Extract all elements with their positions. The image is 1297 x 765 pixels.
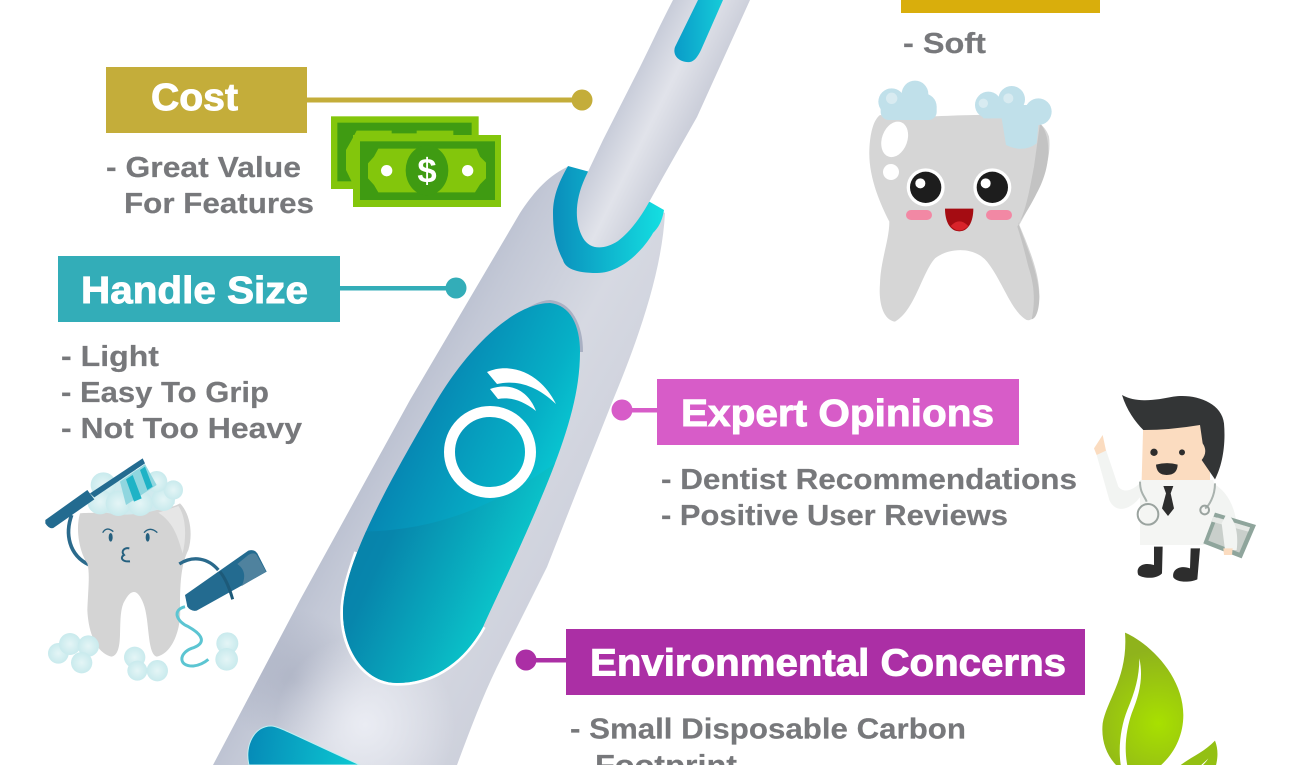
environmental connector (516, 650, 566, 670)
toothbrush handle (200, 160, 680, 765)
soft text: - Soft (903, 28, 986, 60)
expert text (661, 464, 1077, 532)
environmental heading (566, 629, 1085, 695)
expert text: - Positive User Reviews (661, 500, 1008, 532)
cost text: - Great Value (106, 152, 301, 184)
icon: brushing tooth (45, 458, 267, 681)
handle size heading (58, 256, 340, 322)
panel: handle size (58, 256, 466, 445)
handle size text: - Not Too Heavy (61, 413, 302, 445)
cost text (106, 152, 314, 220)
toothbrush neck (577, 0, 750, 247)
cost heading: Cost (151, 77, 238, 119)
handle size text (61, 341, 302, 445)
expert connector (612, 400, 657, 420)
handle size text: - Easy To Grip (61, 377, 269, 409)
environmental text (570, 714, 966, 765)
button panel rim (478, 302, 581, 358)
expert heading (657, 379, 1019, 445)
cost connector (307, 90, 592, 110)
icon: money (331, 116, 501, 207)
panel: soft bristles (901, 0, 1100, 60)
neck teal stripe (674, 0, 723, 62)
panel lower shade (343, 464, 555, 683)
bottom teal pad (248, 726, 360, 765)
cost heading (106, 67, 307, 133)
icon: doctor (1094, 395, 1256, 582)
icon: money: $ (417, 153, 437, 191)
handle size text: - Light (61, 341, 159, 373)
signal arcs (487, 368, 556, 411)
panel: environmental concerns (516, 629, 1085, 765)
button panel white edge (342, 552, 484, 684)
environmental text: - Small Disposable Carbon (570, 714, 966, 746)
environmental heading: Environmental Concerns (590, 642, 1066, 684)
icon: leaves (1102, 633, 1217, 765)
panel: cost (106, 67, 592, 220)
button panel (340, 300, 585, 690)
expert text: - Dentist Recommendations (661, 464, 1077, 496)
soft header bar (901, 0, 1100, 13)
handle size heading: Handle Size (81, 270, 308, 312)
cost text: For Features (124, 188, 314, 220)
panel: expert opinions (612, 379, 1077, 532)
power button ring (450, 412, 530, 492)
expert heading: Expert Opinions (681, 393, 994, 435)
toothbrush (200, 0, 750, 765)
collar ring (553, 166, 664, 273)
icon: happy tooth (869, 81, 1052, 322)
handle size connector (340, 278, 466, 298)
